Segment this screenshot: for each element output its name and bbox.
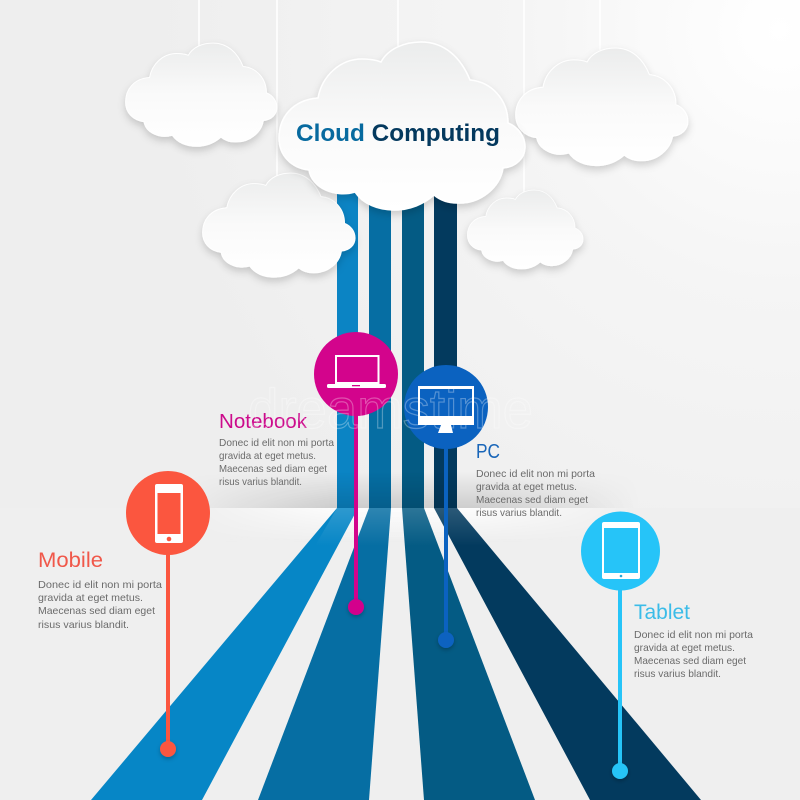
tablet badge (581, 512, 660, 590)
notebook text: Donec id elit non mi porta (219, 437, 334, 449)
panel: tablet (581, 512, 753, 779)
watermark: dreamstime (248, 377, 533, 440)
icon: tablet (602, 522, 640, 579)
cloud: lower left (203, 173, 355, 277)
notebook text: gravida at eget metus. (219, 450, 316, 462)
tablet text: gravida at eget metus. (634, 642, 735, 654)
tablet heading: Tablet (634, 601, 690, 624)
title: Cloud Computing (296, 120, 500, 147)
panel: notebook (219, 332, 398, 615)
mobile heading: Mobile (38, 549, 103, 572)
tablet text: Donec id elit non mi porta (634, 629, 753, 641)
cloud: main (279, 42, 525, 210)
floor (270, 508, 534, 522)
cloud: lower right (467, 190, 583, 269)
perspective stripes (91, 508, 701, 800)
pc text: Maecenas sed diam eget (476, 494, 588, 506)
icon: pc monitor (418, 386, 474, 433)
icon: mobile phone (155, 484, 183, 543)
pc text: risus varius blandit. (476, 507, 562, 519)
notebook text (219, 437, 334, 488)
hanging strings (199, 0, 600, 192)
pc text: Donec id elit non mi porta (476, 468, 595, 480)
mobile text (38, 579, 162, 631)
tablet text (634, 629, 753, 680)
panel: mobile (38, 471, 210, 757)
mobile text: Maecenas sed diam eget (38, 605, 155, 617)
vertical stripes (337, 190, 457, 508)
panel: pc (404, 365, 595, 648)
pc text (476, 468, 595, 519)
pc connector (438, 445, 454, 648)
notebook connector (348, 410, 364, 615)
tablet connector (612, 588, 628, 779)
tablet text: Maecenas sed diam eget (634, 655, 746, 667)
notebook badge (314, 332, 398, 416)
tablet text: risus varius blandit. (634, 668, 721, 680)
mobile connector (160, 550, 176, 757)
pc text: gravida at eget metus. (476, 481, 577, 493)
cloud: upper right (516, 48, 688, 166)
mobile text: Donec id elit non mi porta (38, 579, 162, 591)
mobile text: risus varius blandit. (38, 619, 129, 631)
wall shadow (216, 480, 602, 508)
notebook heading: Notebook (219, 410, 308, 433)
mobile text: gravida at eget metus. (38, 592, 143, 604)
cloud: upper left (126, 43, 277, 146)
mobile badge (126, 471, 210, 555)
notebook text: Maecenas sed diam eget (219, 463, 327, 475)
pc badge (404, 365, 488, 449)
notebook text: risus varius blandit. (219, 476, 302, 488)
icon: notebook (327, 356, 386, 388)
pc heading: PC (476, 441, 500, 463)
